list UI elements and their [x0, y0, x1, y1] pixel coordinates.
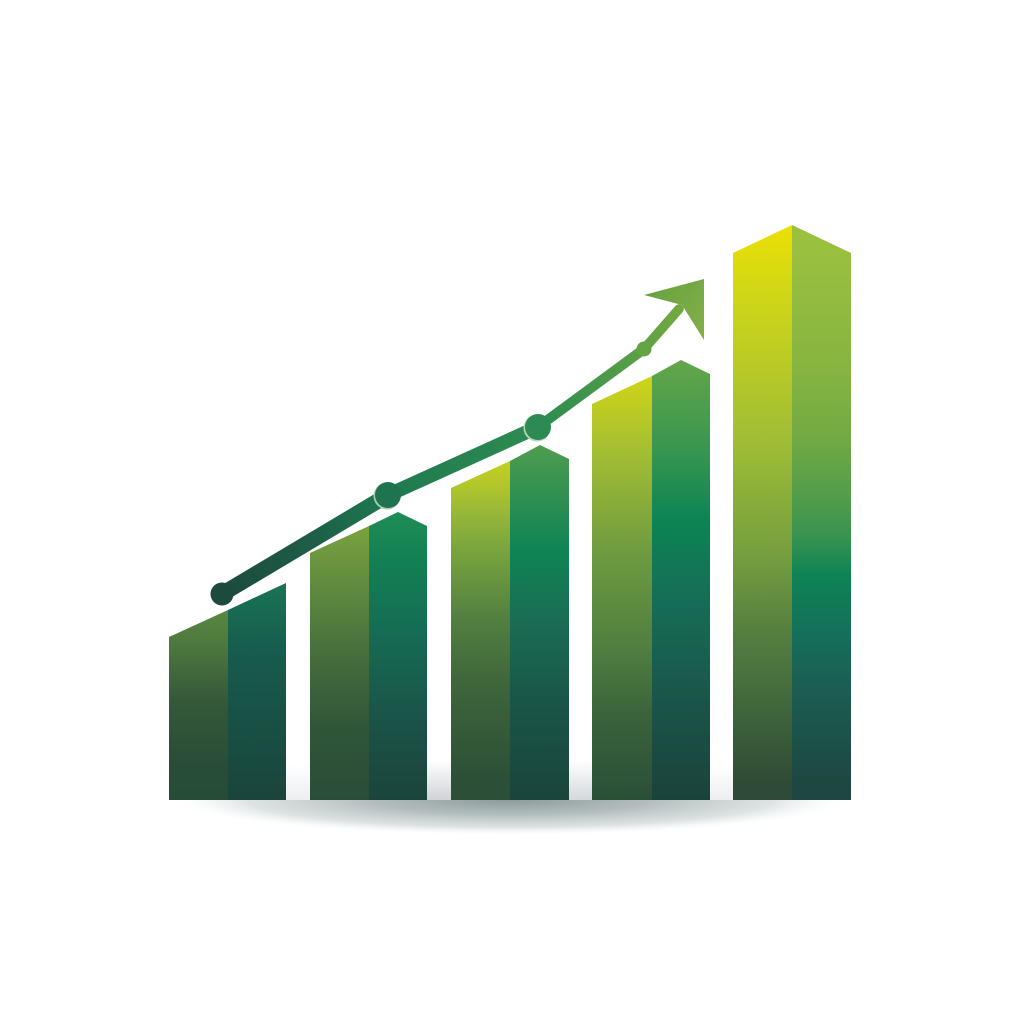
line [222, 309, 679, 594]
bar 4 [592, 360, 710, 800]
trend line with arrow [210, 279, 704, 606]
shading in the gaps between bars [286, 760, 733, 800]
bar 1 [169, 583, 286, 800]
arrow head [644, 279, 704, 340]
marker: fourth [636, 342, 652, 356]
marker: start [210, 582, 234, 606]
bar 5 [733, 225, 851, 800]
bar 3 [451, 445, 569, 800]
bar 2 [310, 512, 427, 800]
marker: second [374, 482, 401, 510]
marker: third [524, 414, 551, 442]
ground shadow [170, 800, 850, 836]
